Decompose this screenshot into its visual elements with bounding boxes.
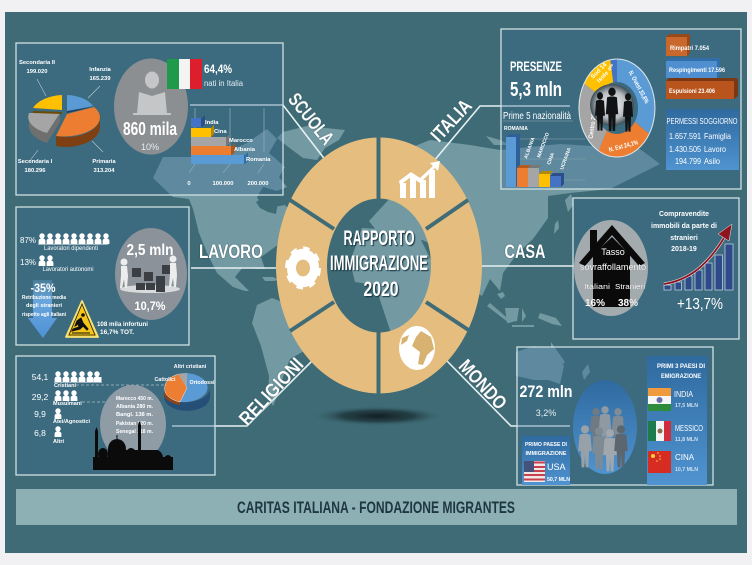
- footer banner: [16, 489, 737, 525]
- box: primo paese di immigrazione: 50,7 MLN: [547, 477, 570, 483]
- section label: SCUOLA: SCUOLA: [283, 90, 337, 150]
- box: primo paese di immigrazione: USA: [547, 462, 566, 472]
- box: primi 3 paesi di emigrazione: 17,5 MLN: [675, 403, 698, 409]
- wheel shadow: [312, 406, 444, 426]
- title: [330, 227, 428, 301]
- hudson bay: [256, 196, 278, 214]
- panel: scuola: [16, 43, 283, 195]
- bars: rimpatri, respingimenti, espulsioni: Rimpatri 7.054: [670, 45, 709, 52]
- worker circle: [115, 228, 187, 320]
- muslim countries ellipse: Pakistan 120 m.: [116, 421, 153, 427]
- prime 5 nazionalita: ROMANIA: [504, 126, 528, 132]
- box: permessi soggiorno: Lavoro: [704, 144, 726, 154]
- icon: Italian flag: [167, 59, 202, 89]
- bar chart: nationalities: Cina: [214, 129, 227, 135]
- icon: mosque silhouette: [93, 421, 173, 470]
- icon: team work blocks: [120, 256, 180, 293]
- house circle: Stranieri: [615, 282, 645, 291]
- share born in Italy: nati in Italia: [204, 79, 244, 88]
- box: permessi soggiorno: 1.657.591: [669, 131, 701, 141]
- icon: USA flag: [524, 461, 545, 482]
- donut chart: regional distribution: N. Ovest 33,8%: [627, 70, 650, 105]
- row: musulmani: [32, 390, 82, 407]
- pie labels: Secondaria II: [19, 60, 55, 66]
- accident figures: [97, 321, 148, 336]
- house circle: Italiani: [584, 282, 610, 291]
- row: atei: [34, 408, 90, 425]
- title: IMMIGRAZIONE: [330, 252, 428, 275]
- box: permessi soggiorno: [666, 109, 739, 170]
- bar chart: nationalities: Romania: [246, 157, 271, 163]
- icon: house: [579, 225, 645, 307]
- accident figures: 16,7% TOT.: [100, 329, 134, 336]
- footer banner: CARITAS ITALIANA - FONDAZIONE MIGRANTES: [237, 498, 515, 517]
- pie chart: school levels: [28, 79, 103, 162]
- pie chart: christians: Ortodossi: [189, 380, 215, 386]
- prime 5 nazionalita: Prime 5 nazionalità: [503, 111, 571, 122]
- bar chart: growth: [664, 244, 733, 290]
- compravendite caption: stranieri: [670, 235, 698, 242]
- box: permessi soggiorno: Famiglia: [704, 131, 731, 141]
- share born in Italy: [204, 62, 244, 88]
- row: altri: [34, 426, 64, 445]
- box: permessi soggiorno: 194.799: [675, 156, 701, 166]
- compravendite caption: [651, 211, 717, 253]
- pie labels: 199.020: [27, 69, 47, 75]
- workers employed: [20, 233, 109, 252]
- compravendite caption: immobili da parte di: [651, 223, 717, 230]
- compravendite caption: Compravendite: [659, 211, 709, 218]
- prime 5 nazionalita: UCRAINA: [559, 147, 573, 171]
- arrow: wage gap: [22, 280, 67, 338]
- donut chart: regional distribution: Isole: [596, 70, 611, 84]
- icon: warning sign: [66, 301, 98, 337]
- pie labels: 165.239: [90, 76, 111, 82]
- house circle: Tasso: [601, 247, 625, 257]
- panel: lavoro: [16, 207, 189, 345]
- muslim countries ellipse: Marocco 450 m.: [116, 396, 153, 402]
- muslim countries ellipse: [100, 385, 166, 463]
- donut chart: regional distribution: Sud 14: [590, 62, 609, 80]
- worker circle: 2,5 mln: [126, 242, 174, 259]
- central wheel: [276, 135, 482, 396]
- pie labels: 180.296: [25, 168, 46, 174]
- pie chart: christians: Cattolici: [155, 377, 176, 383]
- workers self-employed: Lavoratori autonomi: [42, 267, 94, 273]
- headline: 3,2%: [536, 408, 556, 418]
- panel: casa: [573, 198, 739, 339]
- row: altri: Altri: [53, 439, 64, 445]
- prime 5 nazionalita: MAROCCO: [536, 132, 551, 159]
- student circle: [114, 58, 188, 154]
- arrow: wage gap: degli stranieri: [26, 303, 62, 309]
- section label: RELIGIONI: RELIGIONI: [236, 354, 308, 430]
- compravendite caption: 2018-19: [671, 246, 697, 253]
- box: primo paese di immigrazione: PRIMO PAESE DI: [525, 442, 567, 448]
- box: primi 3 paesi di emigrazione: MESSICO: [675, 424, 703, 433]
- row: musulmani: 29,2: [32, 392, 49, 402]
- title: 2020: [364, 278, 398, 301]
- presenze headline: 5,3 mln: [510, 79, 562, 101]
- donut chart: regional distribution: N. Est 24,1%: [608, 139, 639, 154]
- value: +13,7%: +13,7%: [677, 296, 723, 313]
- accident figures: 108 mila infortuni: [97, 321, 148, 328]
- icon: gear: [287, 249, 319, 287]
- box: primi 3 paesi di emigrazione: EMIGRAZIONE: [661, 373, 702, 380]
- worker circle: 10,7%: [134, 299, 166, 313]
- section label: MONDO: MONDO: [454, 356, 510, 414]
- bars: rimpatri, respingimenti, espulsioni: Espulsioni 23.406: [669, 88, 715, 95]
- pie labels: Infanzia: [89, 67, 112, 73]
- box: primo paese di immigrazione: [522, 436, 570, 485]
- pie labels: Primaria: [92, 159, 116, 165]
- arrow: wage gap: rispetto agli italiani: [22, 312, 66, 318]
- migrants circle: [573, 380, 637, 474]
- arrow: wage gap: Retribuzione media: [22, 295, 67, 301]
- box: primi 3 paesi di emigrazione: PRIMI 3 PAESI DI: [657, 363, 705, 370]
- muslim countries ellipse: Bangl. 138 m.: [116, 412, 154, 418]
- student circle: 860 mila: [123, 119, 178, 139]
- donut chart: regional distribution: 4%: [607, 63, 615, 72]
- box: primi 3 paesi di emigrazione: 11,8 MLN: [675, 437, 698, 443]
- pie labels: Secondaria I: [18, 159, 53, 165]
- muslim countries ellipse: Senegal 118 m.: [116, 429, 154, 435]
- arrow: rising trend: [664, 224, 732, 284]
- pie chart: christians: Altri cristiani: [174, 364, 207, 370]
- house circle: [574, 220, 648, 316]
- prime 5 nazionalita: ALBANIA: [523, 136, 537, 160]
- box: primi 3 paesi di emigrazione: INDIA: [674, 390, 694, 399]
- row: atei: 9,9: [34, 409, 46, 419]
- panel: religioni: [16, 356, 215, 475]
- pie labels: [18, 60, 116, 174]
- icon: China flag: [648, 451, 671, 473]
- row: cristiani: Cristiani: [54, 383, 76, 389]
- bar chart: nationalities: Marocco: [229, 138, 253, 144]
- box: permessi soggiorno: Asilo: [704, 156, 720, 166]
- student circle: 10%: [141, 142, 159, 152]
- icon: student reading: [133, 72, 171, 115]
- muslim countries ellipse: Albania 280 m.: [116, 404, 154, 410]
- box: primi 3 paesi di emigrazione: 10,7 MLN: [675, 467, 698, 473]
- row: atei: Atei/Agnostici: [53, 419, 90, 425]
- workers self-employed: 13%: [20, 258, 36, 267]
- title: RAPPORTO: [344, 227, 414, 250]
- row: musulmani: Musulmani: [53, 401, 82, 407]
- icon: group of migrants: [578, 406, 628, 471]
- bar chart: nationalities: 0: [187, 181, 191, 187]
- box: permessi soggiorno: 1.430.505: [669, 144, 701, 154]
- box: primi 3 paesi di emigrazione: CINA: [675, 453, 695, 462]
- bar chart: nationalities: 100.000: [213, 181, 233, 187]
- pie labels: 313.204: [94, 168, 115, 174]
- headline: 272 mln: [520, 382, 572, 401]
- presenze headline: [510, 58, 562, 101]
- icon: group of people: [595, 88, 633, 132]
- icon: globe: [399, 326, 435, 370]
- arrow: wage gap: -35%: [30, 281, 56, 295]
- workers employed: Lavoratori dipendenti: [44, 246, 98, 252]
- row: altri: 6,8: [34, 428, 46, 438]
- panel: mondo: [517, 347, 713, 485]
- row: cristiani: [32, 371, 102, 389]
- world map: [153, 126, 660, 406]
- bar chart: nationalities: 200.000: [248, 181, 268, 187]
- icon: growth chart: [399, 161, 440, 198]
- workers self-employed: [20, 255, 94, 273]
- box: primi 3 paesi di emigrazione: [647, 356, 707, 485]
- connector lines: [172, 105, 574, 426]
- headline: [520, 382, 572, 418]
- bars: rimpatri, respingimenti, espulsioni: Respingimenti 17.596: [669, 67, 725, 74]
- house circle: sovraffollamento: [580, 262, 646, 272]
- house circle: 38%: [618, 298, 638, 309]
- donut chart: regional distribution: [579, 59, 655, 157]
- prime 5 nazionalita: CINA: [546, 152, 556, 166]
- pie chart: christians: [155, 364, 215, 411]
- bar chart: nationalities: India: [205, 120, 219, 126]
- section label: CASA: CASA: [504, 242, 546, 263]
- workers employed: 87%: [20, 236, 36, 245]
- donut chart: regional distribution: Centro 25,3%: [588, 104, 599, 139]
- icon: Mexico flag: [648, 421, 671, 441]
- section label: LAVORO: LAVORO: [199, 242, 263, 263]
- panel: italia: [501, 29, 741, 189]
- presenze headline: PRESENZE: [510, 58, 562, 74]
- box: primo paese di immigrazione: IMMIGRAZIONE: [526, 451, 567, 457]
- icon: India flag: [648, 388, 671, 411]
- bar chart: nationalities: [187, 108, 271, 187]
- bars: rimpatri, respingimenti, espulsioni: [666, 34, 738, 99]
- prime 5 nazionalita: [503, 111, 585, 187]
- bar chart: nationalities: Albania: [234, 147, 256, 153]
- share born in Italy: 64,4%: [204, 62, 232, 76]
- row: cristiani: 54,1: [32, 372, 49, 382]
- house circle: 16%: [585, 298, 605, 309]
- section label: ITALIA: ITALIA: [427, 96, 477, 147]
